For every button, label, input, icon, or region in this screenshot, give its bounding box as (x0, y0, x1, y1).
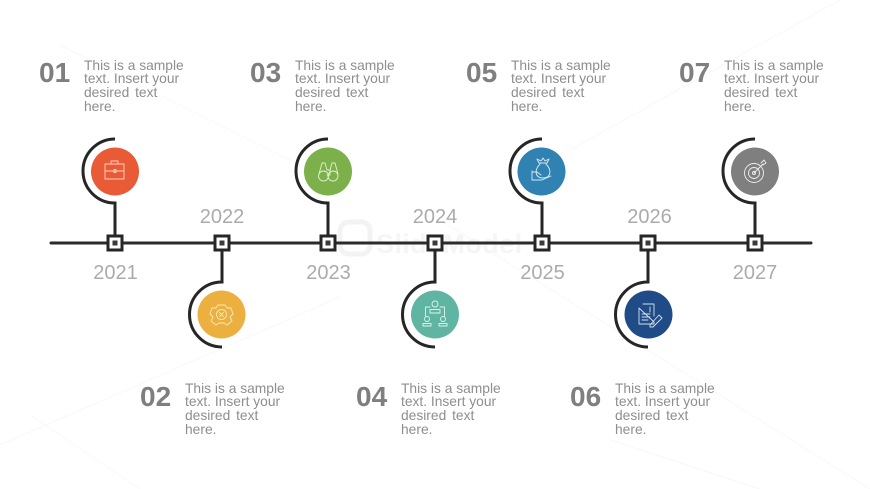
text block 01: desired text (84, 85, 157, 100)
year labels: 2027 (733, 262, 777, 284)
text block 04: 04 (356, 381, 388, 412)
node 2027 (748, 236, 762, 250)
node 2024 (428, 236, 442, 250)
node 2023 (321, 236, 335, 250)
year labels: 2022 (200, 206, 244, 228)
text block 04 (356, 381, 501, 437)
node 2022 (215, 236, 229, 250)
text block 07 (679, 57, 824, 114)
icon: org chart (423, 301, 447, 326)
text block 06: here. (615, 422, 646, 437)
text block 07: desired text (724, 85, 797, 100)
watermark (340, 222, 523, 259)
step 03 marker (296, 139, 352, 250)
text block 07: 07 (679, 57, 710, 88)
step 01 marker (83, 139, 139, 250)
node 2026 (641, 236, 655, 250)
text block 04: text. Insert your (401, 394, 496, 409)
text block 06: text. Insert your (615, 394, 710, 409)
icon: binoculars (318, 163, 338, 181)
node 2021 (108, 236, 122, 250)
text block 03: This is a sample (295, 58, 395, 73)
year labels: 2021 (93, 262, 138, 284)
step 02 marker (190, 236, 246, 347)
text block 06: desired text (615, 408, 688, 423)
text block 01: This is a sample (84, 58, 184, 73)
step 04 marker (402, 236, 459, 347)
step 07 marker (723, 139, 779, 250)
text block 04: desired text (401, 408, 474, 423)
text block 03: desired text (295, 85, 368, 100)
icon: document with pen (639, 304, 662, 327)
text block 02: text. Insert your (185, 394, 280, 409)
year labels: 2026 (627, 206, 672, 228)
text block 02: 02 (140, 381, 171, 412)
year labels: 2025 (520, 262, 565, 284)
text block 02: This is a sample (185, 381, 285, 396)
text block 02 (140, 381, 285, 437)
text block 03: here. (295, 99, 326, 114)
timeline axis (51, 242, 811, 244)
text block 01: 01 (39, 57, 70, 88)
text block 04: This is a sample (401, 381, 501, 396)
node 2025 (535, 236, 549, 250)
step 05 marker (510, 139, 566, 250)
year labels: 2023 (306, 262, 351, 284)
icon: money bag in hand (532, 158, 551, 180)
text block 05: text. Insert your (511, 71, 606, 86)
text block 01 (39, 57, 184, 114)
text block 02: desired text (185, 408, 258, 423)
icon: target (744, 160, 766, 182)
text block 05: 05 (466, 57, 497, 88)
step 06 marker (616, 236, 672, 347)
text block 05 (466, 57, 611, 114)
text block 04: here. (401, 422, 432, 437)
watermark: SlideModel (376, 229, 523, 259)
text block 06 (570, 381, 715, 437)
text block 01: text. Insert your (84, 71, 179, 86)
text block 07: This is a sample (724, 58, 824, 73)
year labels: 2024 (413, 206, 457, 228)
text block 03: 03 (250, 57, 281, 88)
text block 03: text. Insert your (295, 71, 390, 86)
text block 02: here. (185, 422, 216, 437)
text block 05: This is a sample (511, 58, 611, 73)
text block 05: desired text (511, 85, 584, 100)
text block 06: 06 (570, 381, 601, 412)
text block 05: here. (511, 99, 542, 114)
text block 03 (250, 57, 395, 114)
text block 07: here. (724, 99, 755, 114)
text block 07: text. Insert your (724, 71, 819, 86)
text block 01: here. (84, 99, 115, 114)
icon: gear (210, 305, 233, 325)
year labels (93, 206, 777, 284)
icon: briefcase (105, 161, 124, 179)
text block 06: This is a sample (615, 381, 715, 396)
